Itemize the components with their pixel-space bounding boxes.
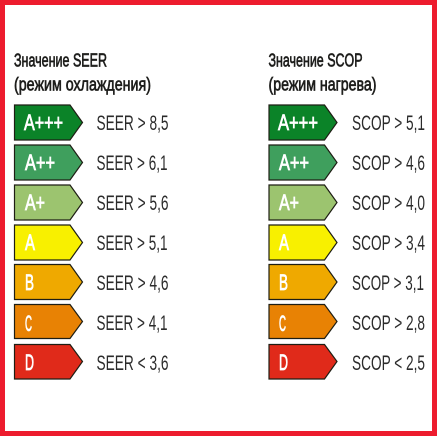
- SEER row A+++: A+++: [24, 110, 63, 135]
- SCOP row C: C: [279, 311, 286, 336]
- SCOP row A+: A+: [279, 190, 299, 215]
- heading: SCOP: (режим нагрева): [268, 74, 376, 94]
- SEER row D: D: [25, 350, 34, 375]
- SEER row A+++: SEER > 8,5: [96, 112, 168, 135]
- heading: SEER: [14, 50, 151, 94]
- SCOP row A: A: [279, 230, 289, 255]
- SCOP row A++: A++: [279, 150, 309, 175]
- panel: SCOP heating mode: [268, 50, 425, 379]
- SEER row A+: SEER > 5,6: [96, 192, 168, 215]
- SEER row A: A: [25, 230, 35, 255]
- SEER row A+: A+: [25, 190, 45, 215]
- heading: SEER: Значение SEER: [14, 50, 107, 70]
- SCOP row B: B: [279, 270, 288, 295]
- heading: SEER: (режим охлаждения): [14, 74, 151, 94]
- SEER row A+: [14, 185, 168, 220]
- SEER row C: SEER > 4,1: [96, 312, 168, 335]
- SCOP row C: [269, 304, 425, 338]
- SEER row B: B: [25, 270, 34, 295]
- SEER row A: [14, 225, 168, 260]
- heading: SCOP: Значение SCOP: [268, 50, 362, 70]
- SCOP row D: D: [279, 350, 288, 375]
- SEER row B: [14, 264, 168, 300]
- SCOP row A++: [269, 145, 425, 180]
- SEER row A++: SEER > 6,1: [96, 152, 168, 175]
- SCOP row A: [269, 225, 425, 260]
- SEER row A+++: [14, 105, 168, 140]
- SEER row D: SEER < 3,6: [96, 352, 168, 375]
- SEER row D: [14, 344, 168, 379]
- SCOP row A+: [269, 185, 425, 220]
- SEER row A++: A++: [25, 150, 55, 175]
- SEER row C: [14, 304, 168, 338]
- SCOP row A+++: [269, 105, 425, 140]
- SEER row A: SEER > 5,1: [96, 232, 168, 255]
- panel: SEER cooling mode: [14, 50, 168, 379]
- SEER row C: C: [25, 311, 32, 336]
- SEER row A++: [14, 145, 168, 180]
- SCOP row B: [269, 264, 424, 300]
- SEER row B: SEER > 4,6: [96, 272, 168, 295]
- SCOP row D: [269, 344, 425, 379]
- SCOP row A+++: A+++: [278, 110, 318, 135]
- heading: SCOP: [268, 50, 376, 94]
